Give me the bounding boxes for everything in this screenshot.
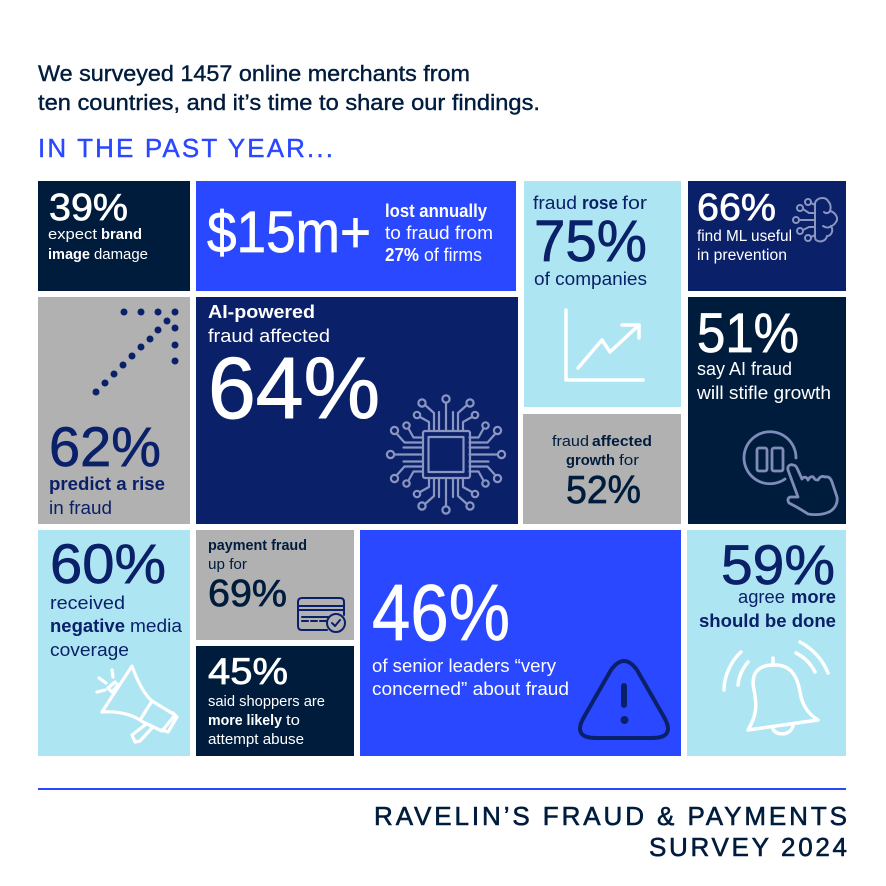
icon: brain circuit: [793, 198, 837, 241]
panel: fraud rose for 75%: fraud: [533, 193, 577, 213]
panel: $15m+ lost annually: lost annually: [385, 201, 487, 221]
panel: 66% ML useful: in prevention: [697, 247, 787, 264]
intro heading: We surveyed 1457 online merchants from: [38, 61, 470, 86]
panel: AI-powered fraud 64%: fraud affected: [208, 325, 330, 346]
footer rule: [38, 788, 846, 790]
panel: 45% shoppers abuse: more likely: [208, 712, 283, 729]
panel: payment fraud 69%: [196, 530, 354, 640]
panel: 39% brand image damage: damage: [94, 246, 148, 263]
panel: 66% ML useful: find ML useful: [697, 228, 792, 245]
footer title: SURVEY 2024: [649, 832, 847, 862]
panel: 39% brand image damage: expect: [48, 226, 98, 243]
panel: 59% more should be done: 59%: [721, 533, 835, 596]
panel: 46% senior leaders: 46%: [372, 568, 510, 657]
panel: 51% stifle growth: say AI fraud: [697, 359, 792, 379]
panel: 52% growth affected: [523, 414, 681, 524]
panel: 62% predict a rise: 62%: [49, 415, 161, 478]
panel: 52% growth affected: 52%: [566, 469, 641, 512]
panel: 45% shoppers abuse: to: [286, 712, 300, 729]
panel: payment fraud 69%: payment fraud: [208, 538, 307, 554]
footer title: [374, 801, 847, 862]
icon: warning triangle: [580, 661, 668, 738]
subheading: in the past year: IN THE PAST YEAR...: [38, 133, 333, 163]
panel: payment fraud 69%: up for: [208, 556, 247, 573]
panel: AI-powered fraud 64%: 64%: [208, 340, 380, 437]
panel: 52% growth affected: fraud: [552, 433, 589, 450]
panel: 60% negative media coverage: coverage: [50, 640, 129, 660]
icon: rising line chart: [566, 310, 643, 380]
panel: fraud rose for 75%: 75%: [534, 209, 647, 274]
panel: 62% predict a rise: [38, 297, 190, 524]
intro heading: ten countries, and it’s time to share our findings.: [38, 90, 540, 115]
footer title: RAVELIN’S FRAUD & PAYMENTS: [374, 801, 847, 831]
panel: 39% brand image damage: image: [48, 246, 90, 263]
panel: 45% shoppers abuse: 45%: [208, 651, 288, 692]
icon: dotted arrow: [92, 308, 178, 396]
panel: 45% shoppers abuse: attempt abuse: [208, 731, 304, 748]
panel: 66% ML useful: 66%: [697, 187, 776, 229]
icon: credit card with check: [298, 598, 345, 632]
panel: 45% shoppers abuse: [196, 646, 354, 756]
panel: 60% negative media coverage: media: [130, 616, 183, 636]
panel: fraud rose for 75%: of companies: [534, 269, 647, 289]
panel: payment fraud 69%: 69%: [208, 573, 287, 615]
panel: AI-powered fraud 64%: [196, 297, 518, 524]
icon: megaphone: [97, 666, 177, 742]
panel: 51% stifle growth: [688, 297, 846, 524]
panel: 51% stifle growth: 51%: [697, 301, 799, 364]
panel: 66% ML useful: [688, 181, 846, 291]
panel: 52% growth affected: growth: [566, 452, 615, 469]
icon: ringing bell: [724, 642, 828, 734]
panel: 39% brand image damage: brand: [101, 226, 142, 243]
panel: 59% more should be done: [687, 530, 846, 756]
panel: 60% negative media coverage: [38, 530, 190, 756]
intro heading: [38, 61, 540, 115]
panel: 62% predict a rise: predict a rise: [49, 474, 165, 494]
panel: 60% negative media coverage: 60%: [50, 532, 166, 595]
panel: 51% stifle growth: will stifle growth: [696, 383, 831, 403]
panel: 39% brand image damage: [38, 181, 190, 291]
panel: 59% more should be done: should be done: [699, 611, 836, 631]
panel: $15m+ lost annually: [196, 181, 516, 291]
panel: 46% senior leaders: of senior leaders “very: [372, 656, 556, 676]
panel: $15m+ lost annually: 27%: [385, 245, 419, 265]
panel: fraud rose for 75%: for: [622, 193, 647, 213]
icon: pause button and pointing hand: [744, 432, 837, 515]
panel: 60% negative media coverage: received: [50, 593, 125, 613]
panel: AI-powered fraud 64%: AI-powered: [208, 301, 315, 322]
panel: 46% senior leaders: [360, 530, 681, 756]
panel: 59% more should be done: more: [791, 587, 836, 607]
panel: 62% predict a rise: in fraud: [49, 498, 112, 518]
icon: microchip: [387, 395, 505, 514]
panel: 60% negative media coverage: negative: [50, 616, 125, 636]
panel: 45% shoppers abuse: said shoppers are: [208, 693, 325, 710]
panel: 46% senior leaders: concerned” about fraud: [372, 679, 569, 699]
panel: 59% more should be done: agree: [738, 587, 785, 607]
panel: $15m+ lost annually: to fraud from: [385, 223, 493, 243]
panel: 52% growth affected: affected: [592, 433, 652, 450]
panel: fraud rose for 75%: rose: [582, 193, 618, 213]
panel: fraud rose for 75%: [524, 181, 681, 407]
panel: 52% growth affected: for: [619, 452, 639, 469]
panel: 39% brand image damage: 39%: [49, 187, 128, 229]
panel: $15m+ lost annually: $15m+: [207, 200, 371, 265]
panel: $15m+ lost annually: of firms: [424, 245, 482, 265]
